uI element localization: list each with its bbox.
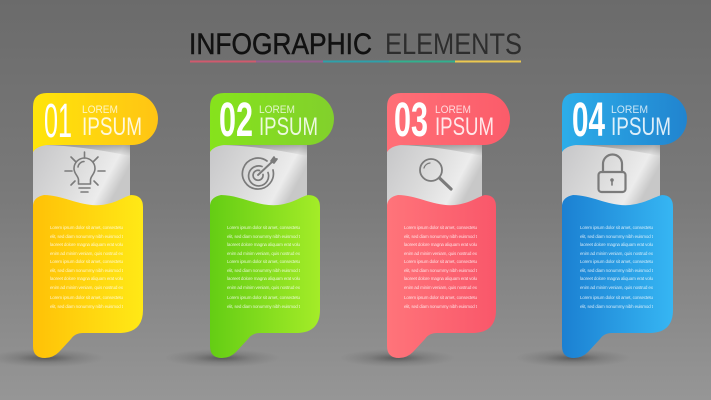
title: ELEMENTS [385, 28, 522, 61]
panel: step 03 [387, 93, 510, 358]
body text: enim ad minim veniam, quis nostrud ex [227, 251, 301, 256]
body text: elit, sed diam nonummy nibh euismod t [580, 234, 654, 239]
header shadow [399, 145, 482, 156]
body text: Lorem ipsum dolor sit amet, consectetu [580, 259, 653, 264]
heading: ipsum: IPSUM [611, 113, 671, 141]
title [189, 28, 522, 61]
body text: laoreet dolore magna aliquam erat volu [227, 242, 300, 247]
body text: elit, sed diam nonummy nibh euismod t [50, 234, 124, 239]
body text: Lorem ipsum dolor sit amet, consectetu [580, 295, 653, 300]
body text [404, 225, 478, 309]
body text [50, 225, 124, 309]
body card [33, 195, 143, 358]
heading: ipsum: IPSUM [82, 113, 142, 141]
body text: elit, sed diam nonummy nibh euismod t [580, 268, 654, 273]
body card [210, 195, 320, 358]
body card [387, 195, 496, 358]
body text: Lorem ipsum dolor sit amet, consectetu [50, 225, 123, 230]
header shadow [222, 145, 307, 156]
icon: target [242, 157, 277, 189]
body text [580, 225, 654, 309]
body text: elit, sed diam nonummy nibh euismod t [50, 304, 124, 309]
header tab [210, 93, 334, 152]
body text: Lorem ipsum dolor sit amet, consectetu [50, 295, 123, 300]
body text: Lorem ipsum dolor sit amet, consectetu [227, 259, 300, 264]
header tab [33, 93, 158, 152]
body text: enim ad minim veniam, quis nostrud ex [50, 285, 124, 290]
body text: elit, sed diam nonummy nibh euismod t [227, 268, 301, 273]
body text: elit, sed diam nonummy nibh euismod t [227, 304, 301, 309]
body text: laoreet dolore magna aliquam erat volu [50, 276, 123, 281]
body text: enim ad minim veniam, quis nostrud ex [404, 251, 478, 256]
number: 01 [44, 95, 72, 148]
body text: enim ad minim veniam, quis nostrud ex [580, 285, 654, 290]
body text: enim ad minim veniam, quis nostrud ex [404, 285, 478, 290]
body text: Lorem ipsum dolor sit amet, consectetu [404, 295, 477, 300]
body text: elit, sed diam nonummy nibh euismod t [580, 304, 654, 309]
number: 04 [572, 94, 605, 147]
grey icon panel [387, 143, 482, 207]
body text: elit, sed diam nonummy nibh euismod t [227, 234, 301, 239]
header shadow [574, 145, 660, 156]
heading: ipsum: IPSUM [435, 113, 494, 141]
heading: lorem: LOREM [435, 104, 471, 116]
body text: elit, sed diam nonummy nibh euismod t [404, 234, 478, 239]
body text: laoreet dolore magna aliquam erat volu [50, 242, 123, 247]
body text: enim ad minim veniam, quis nostrud ex [227, 285, 301, 290]
heading: ipsum: IPSUM [259, 113, 318, 141]
title underline: multicolour rule [190, 60, 521, 62]
number: 03 [394, 94, 428, 147]
body text: elit, sed diam nonummy nibh euismod t [50, 268, 124, 273]
body text: elit, sed diam nonummy nibh euismod t [404, 268, 478, 273]
title: INFOGRAPHIC [189, 28, 372, 61]
panel: step 04 [562, 93, 687, 358]
body text: elit, sed diam nonummy nibh euismod t [404, 304, 478, 309]
header tab [562, 93, 687, 152]
body text: Lorem ipsum dolor sit amet, consectetu [227, 225, 300, 230]
body text [227, 225, 301, 309]
number: 02 [219, 94, 253, 147]
panel: step 02 [210, 93, 334, 358]
header shadow [45, 145, 130, 156]
body text: Lorem ipsum dolor sit amet, consectetu [227, 295, 300, 300]
header tab [387, 93, 510, 152]
body text: laoreet dolore magna aliquam erat volu [404, 242, 477, 247]
grey icon panel [562, 143, 660, 207]
heading: lorem: LOREM [259, 104, 295, 116]
panel: step 01 [33, 93, 158, 358]
heading: lorem: LOREM [82, 104, 118, 116]
body text: enim ad minim veniam, quis nostrud ex [50, 251, 124, 256]
body text: laoreet dolore magna aliquam erat volu [227, 276, 300, 281]
heading: lorem: LOREM [611, 104, 648, 116]
grey icon panel [210, 143, 307, 207]
body text: Lorem ipsum dolor sit amet, consectetu [580, 225, 653, 230]
body text: laoreet dolore magna aliquam erat volu [580, 242, 653, 247]
body text: Lorem ipsum dolor sit amet, consectetu [404, 259, 477, 264]
icon: padlock [598, 155, 626, 192]
body text: Lorem ipsum dolor sit amet, consectetu [50, 259, 123, 264]
body text: enim ad minim veniam, quis nostrud ex [580, 251, 654, 256]
body text: laoreet dolore magna aliquam erat volu [404, 276, 477, 281]
floor shadows [0, 349, 631, 367]
body text: laoreet dolore magna aliquam erat volu [580, 276, 653, 281]
grey icon panel [33, 143, 130, 207]
body text: Lorem ipsum dolor sit amet, consectetu [404, 225, 477, 230]
icon: light bulb [65, 152, 105, 192]
body card [562, 195, 673, 358]
icon: magnifier [420, 159, 451, 189]
